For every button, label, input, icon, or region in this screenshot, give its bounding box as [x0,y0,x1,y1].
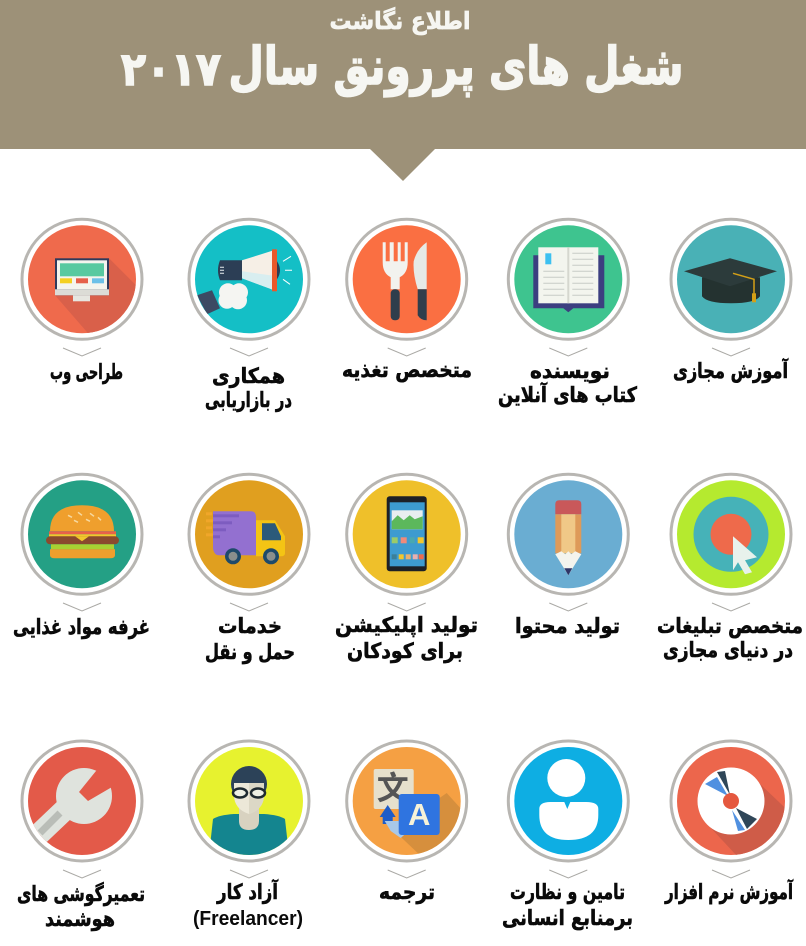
chevron [712,870,750,878]
label line 1: تولید اپلیکیشن [335,613,478,637]
chevron [388,603,426,611]
icon: open book [508,219,628,339]
panel: logistics [189,474,309,664]
chevron [549,603,587,611]
icon: person [508,741,628,861]
icon: translate [345,740,468,862]
chevron [549,348,587,356]
icon: smartphone [347,474,467,594]
chevron [388,348,426,356]
label line 2: هوشمند [45,907,115,931]
panel: web design [22,219,152,384]
chevron [549,870,587,878]
label line 1: خدمات [218,614,282,638]
icon: delivery truck [189,474,309,594]
panel: food booth [13,474,150,639]
label line 1: آزاد کار [216,879,279,904]
icon: target and cursor [671,474,791,594]
label line 1: نویسنده [530,359,610,383]
icon: monitor [20,218,144,341]
chevron [63,870,101,878]
label line 1: تامین و نظارت [510,880,625,904]
label line 2: برمنابع انسانی [502,906,633,930]
chevron [230,603,268,611]
label line 2: (Freelancer) [193,908,303,930]
header banner [0,0,806,181]
panel: content production [508,474,628,638]
panel: software training [664,741,801,904]
panel: translation [347,741,477,904]
chevron [712,348,750,356]
chevron [230,870,268,878]
subtitle: اطلاع نگاشت [330,7,470,35]
label line 2: کتاب های آنلاین [498,382,638,407]
chevron [388,870,426,878]
icon: fork and knife [347,219,467,339]
panel: online book writer [498,219,638,407]
icon: compact disc [670,740,792,862]
chevron [63,348,101,356]
panel: freelancer [189,741,309,930]
icon: translate: 文 [377,763,409,809]
label: ترجمه [379,880,435,904]
icon: graduation cap [671,219,791,339]
icon: pencil [508,474,628,594]
panel: social media ads [657,474,803,662]
icon: translate: A [408,797,430,832]
label line 2: در بازاریابی [205,388,292,412]
icon: man with glasses [189,741,309,861]
icon: megaphone [189,219,309,339]
icon: wrench [22,741,142,861]
label line 2: حمل و نقل [205,640,295,664]
title year: ۲۰۱۷ [121,42,221,96]
chevron [230,348,268,356]
panel: smartphone repair [17,741,145,931]
icon: burger [22,474,142,594]
panel: HR supervision [502,741,633,930]
label: تولید محتوا [515,614,620,638]
label line 2: برای کودکان [347,639,463,663]
panel: nutritionist [342,219,472,382]
panel: kids app development [335,474,478,663]
panel: online education [671,219,791,383]
label: متخصص تغذیه [342,358,472,382]
panel: marketing [189,219,309,412]
chevron [63,603,101,611]
label line 1: همکاری [212,364,285,388]
label: طراحی وب [50,360,123,384]
label line 1: تعمیرگوشی های [17,881,145,906]
title: شغل های پررونق سال [228,37,684,97]
chevron [712,603,750,611]
label: غرفه مواد غذایی [13,615,150,639]
